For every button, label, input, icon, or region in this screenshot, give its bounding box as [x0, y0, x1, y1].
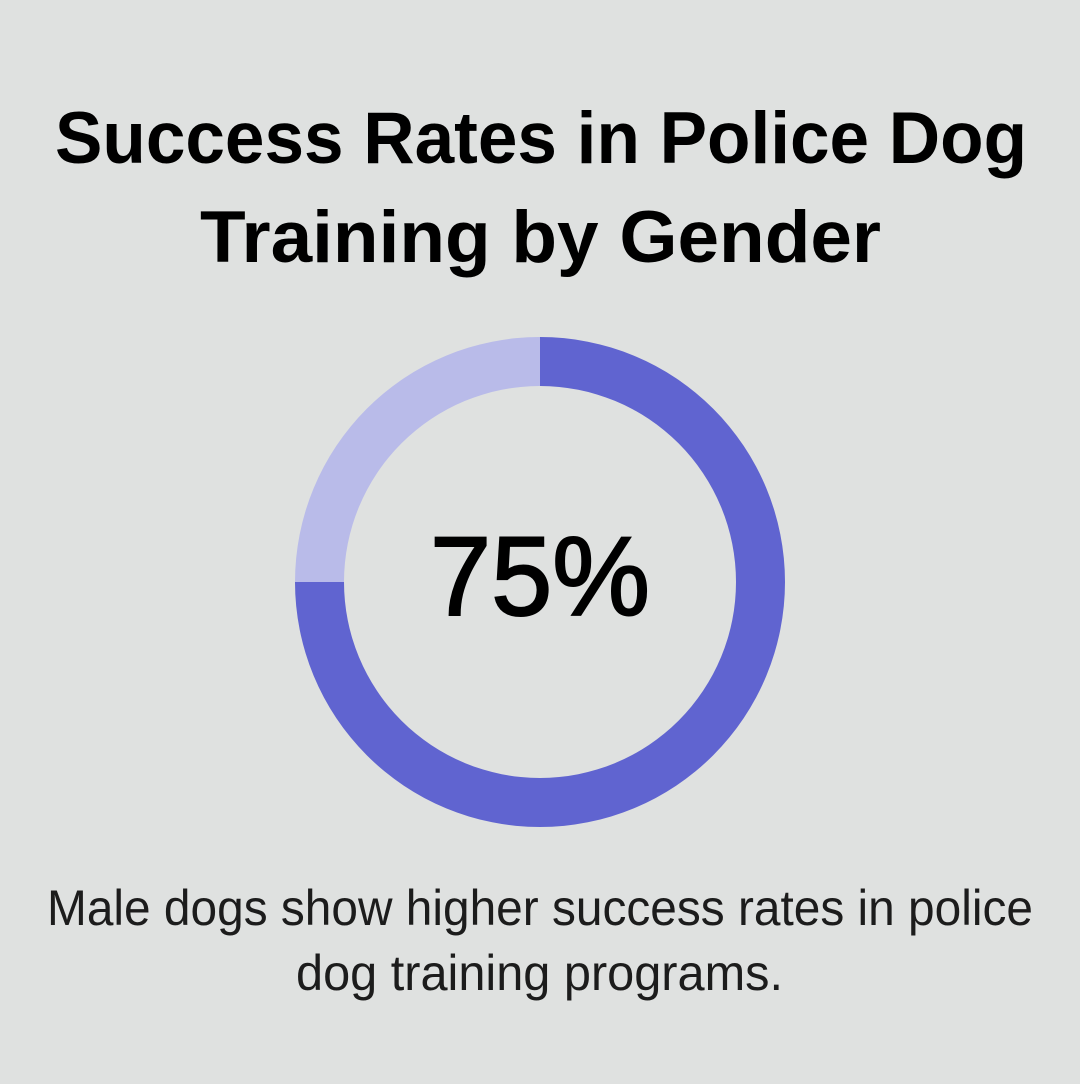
donut chart: 75%	[295, 337, 785, 827]
caption	[47, 880, 1033, 1001]
caption: dog training programs.	[296, 945, 783, 1001]
caption: Male dogs show higher success rates in police	[47, 880, 1033, 936]
remaining 25% arc	[295, 337, 540, 582]
title	[55, 98, 1027, 278]
filled 75% arc	[295, 337, 785, 827]
center value: 75%	[430, 514, 650, 639]
title: Success Rates in Police Dog	[55, 98, 1027, 179]
title: Training by Gender	[200, 197, 881, 278]
